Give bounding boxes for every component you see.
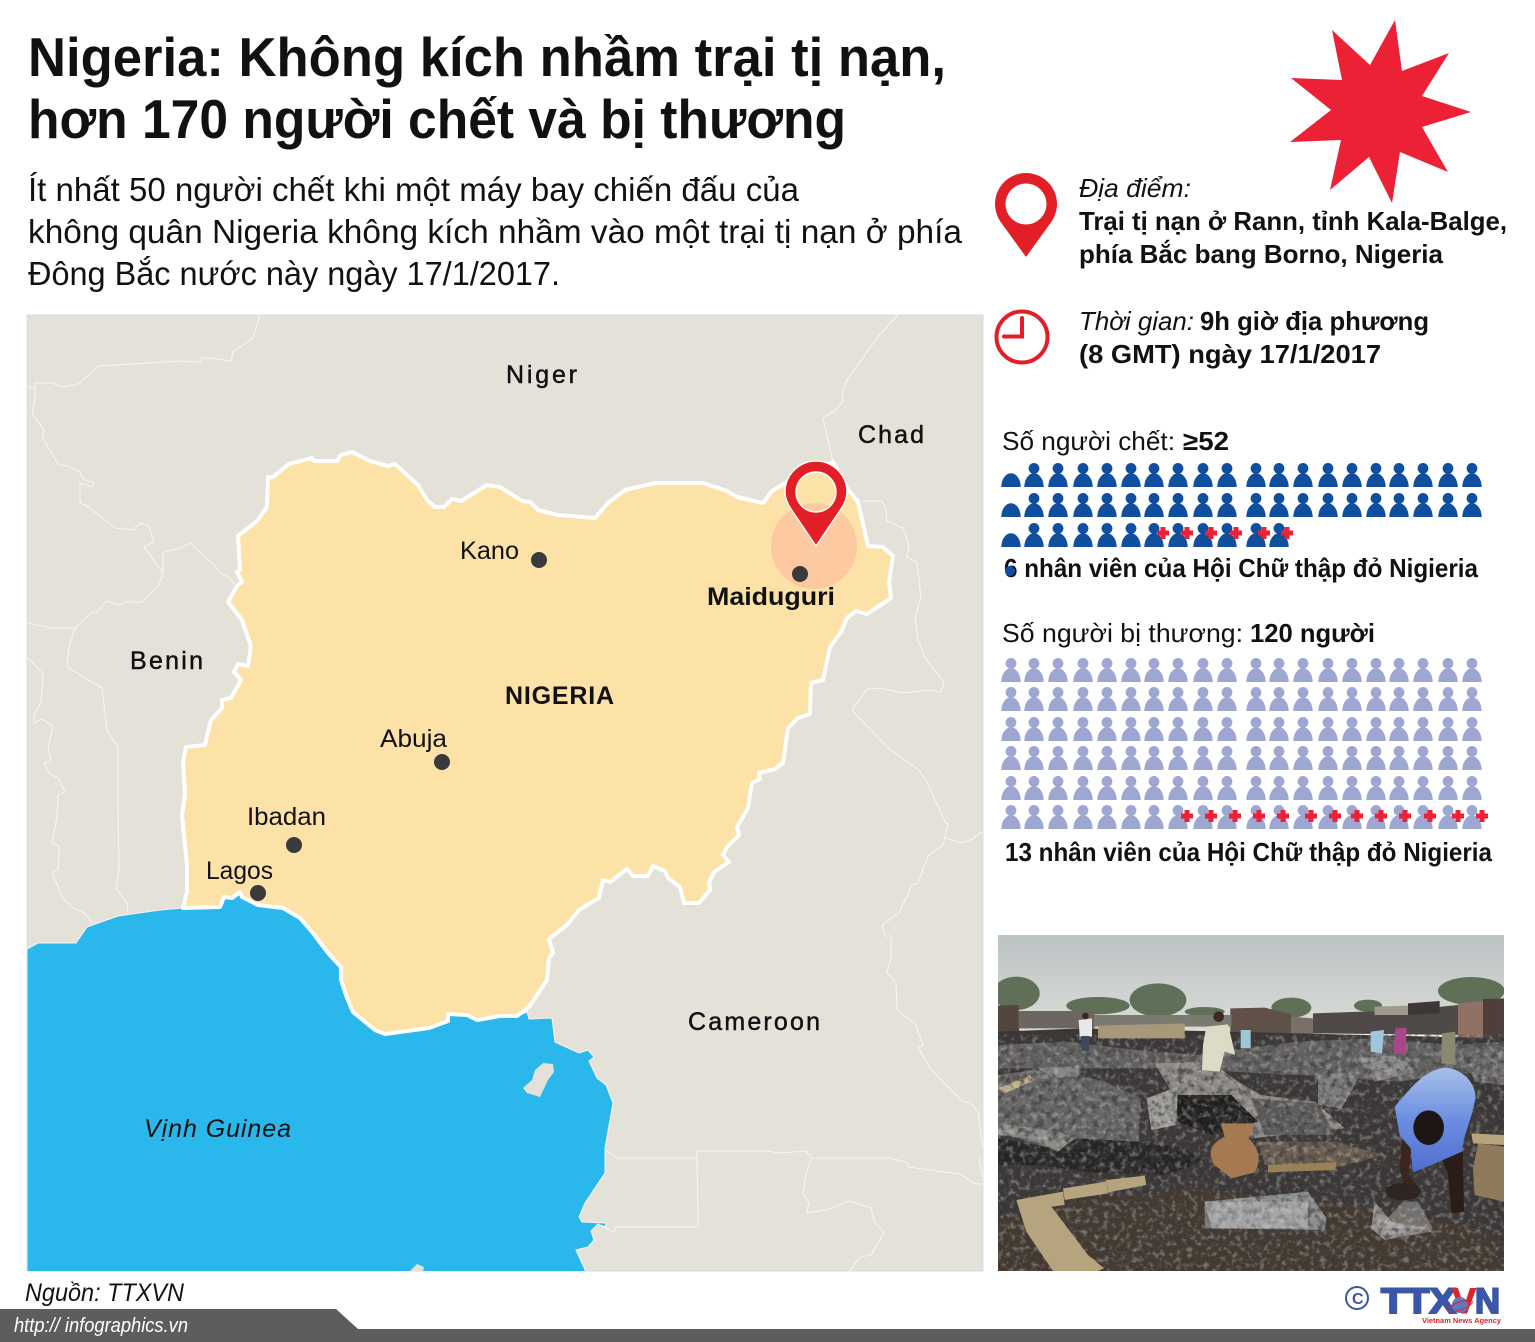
map labels: Niger: [506, 361, 577, 389]
logo: TTXVN: [1346, 1282, 1502, 1325]
country borders: [27, 315, 983, 1271]
photo: burned refugee camp: [993, 935, 1505, 1271]
location text: Địa điểm:: [1079, 173, 1191, 203]
time text: (8 GMT) ngày 17/1/2017: [1079, 339, 1381, 369]
intro text: Ít nhất 50 người chết khi một máy bay chiến đấu của: [28, 171, 800, 208]
sea: Gulf of Guinea: [27, 860, 613, 1272]
island: [523, 1063, 554, 1097]
injured heading: Số người bị thương:: [1002, 618, 1243, 648]
injured heading: [1002, 618, 1375, 648]
icon: red explosion star: [1290, 20, 1471, 203]
injured pictogram: [1001, 658, 1488, 829]
icon: clock: [996, 312, 1048, 362]
Nigeria territory: [182, 452, 893, 1034]
small island: [410, 1264, 424, 1271]
pot: [1211, 1123, 1259, 1178]
intro text: Đông Bắc nước này ngày 17/1/2017.: [28, 255, 560, 292]
title: Nigeria: Không kích nhầm trại tị nạn,: [28, 26, 946, 88]
icon: location pin: [995, 173, 1057, 257]
footer bar: http:// infographics.vn: [14, 1315, 188, 1337]
map labels: Abuja: [380, 725, 447, 753]
location text: phía Bắc bang Borno, Nigeria: [1079, 239, 1444, 269]
man bending in blue robe: [1386, 1068, 1475, 1213]
map labels: NIGERIA: [505, 682, 614, 710]
deaths note: 6 nhân viên của Hội Chữ thập đỏ Nigieria: [1004, 553, 1479, 583]
man in white robe: [1202, 1011, 1235, 1072]
deaths pictogram: [1001, 463, 1482, 547]
map labels: Cameroon: [688, 1008, 820, 1036]
map labels: Chad: [858, 421, 924, 449]
map labels: Maiduguri: [707, 583, 835, 611]
deaths heading: Số người chết:: [1002, 426, 1175, 456]
map labels: Kano: [460, 537, 519, 565]
title: hơn 170 người chết và bị thương: [28, 88, 846, 150]
logo: TTXVN: N: [1475, 1282, 1500, 1321]
time text: [1079, 306, 1429, 369]
logo: TTXVN: C: [1352, 1291, 1364, 1308]
injured note: 13 nhân viên của Hội Chữ thập đỏ Nigieria: [1005, 837, 1492, 867]
logo: TTXVN: Vietnam News Agency: [1422, 1316, 1502, 1325]
footer bar: [0, 1309, 1535, 1342]
time text: 9h giờ địa phương: [1200, 306, 1429, 336]
deaths heading: ≥52: [1183, 426, 1229, 456]
time text: Thời gian:: [1079, 306, 1194, 336]
photo watermark: [1205, 1202, 1433, 1228]
source: Nguồn: TTXVN: [25, 1279, 185, 1307]
panel: map: [27, 315, 983, 1272]
map labels: Benin: [130, 647, 203, 675]
map pin: [785, 461, 847, 546]
map labels: Lagos: [206, 857, 273, 885]
map labels: Ibadan: [247, 803, 326, 831]
logo: TTXVN: V: [1452, 1282, 1477, 1321]
crowd: [1079, 1013, 1455, 1065]
map labels: Vịnh Guinea: [144, 1115, 291, 1143]
city dots: [250, 552, 808, 901]
intro text: không quân Nigeria không kích nhầm vào một trại tị nạn ở phía: [28, 213, 963, 250]
logo: TTXVN: TTX: [1381, 1282, 1457, 1321]
map labels: [130, 361, 924, 1143]
injured heading: 120 người: [1250, 618, 1375, 648]
location text: Trại tị nạn ở Rann, tỉnh Kala-Balge,: [1079, 206, 1507, 236]
intro text: [28, 171, 963, 292]
affected area circle: [771, 503, 857, 589]
bricks: [1016, 1133, 1504, 1271]
title: [28, 26, 946, 150]
location text: [1079, 173, 1507, 269]
